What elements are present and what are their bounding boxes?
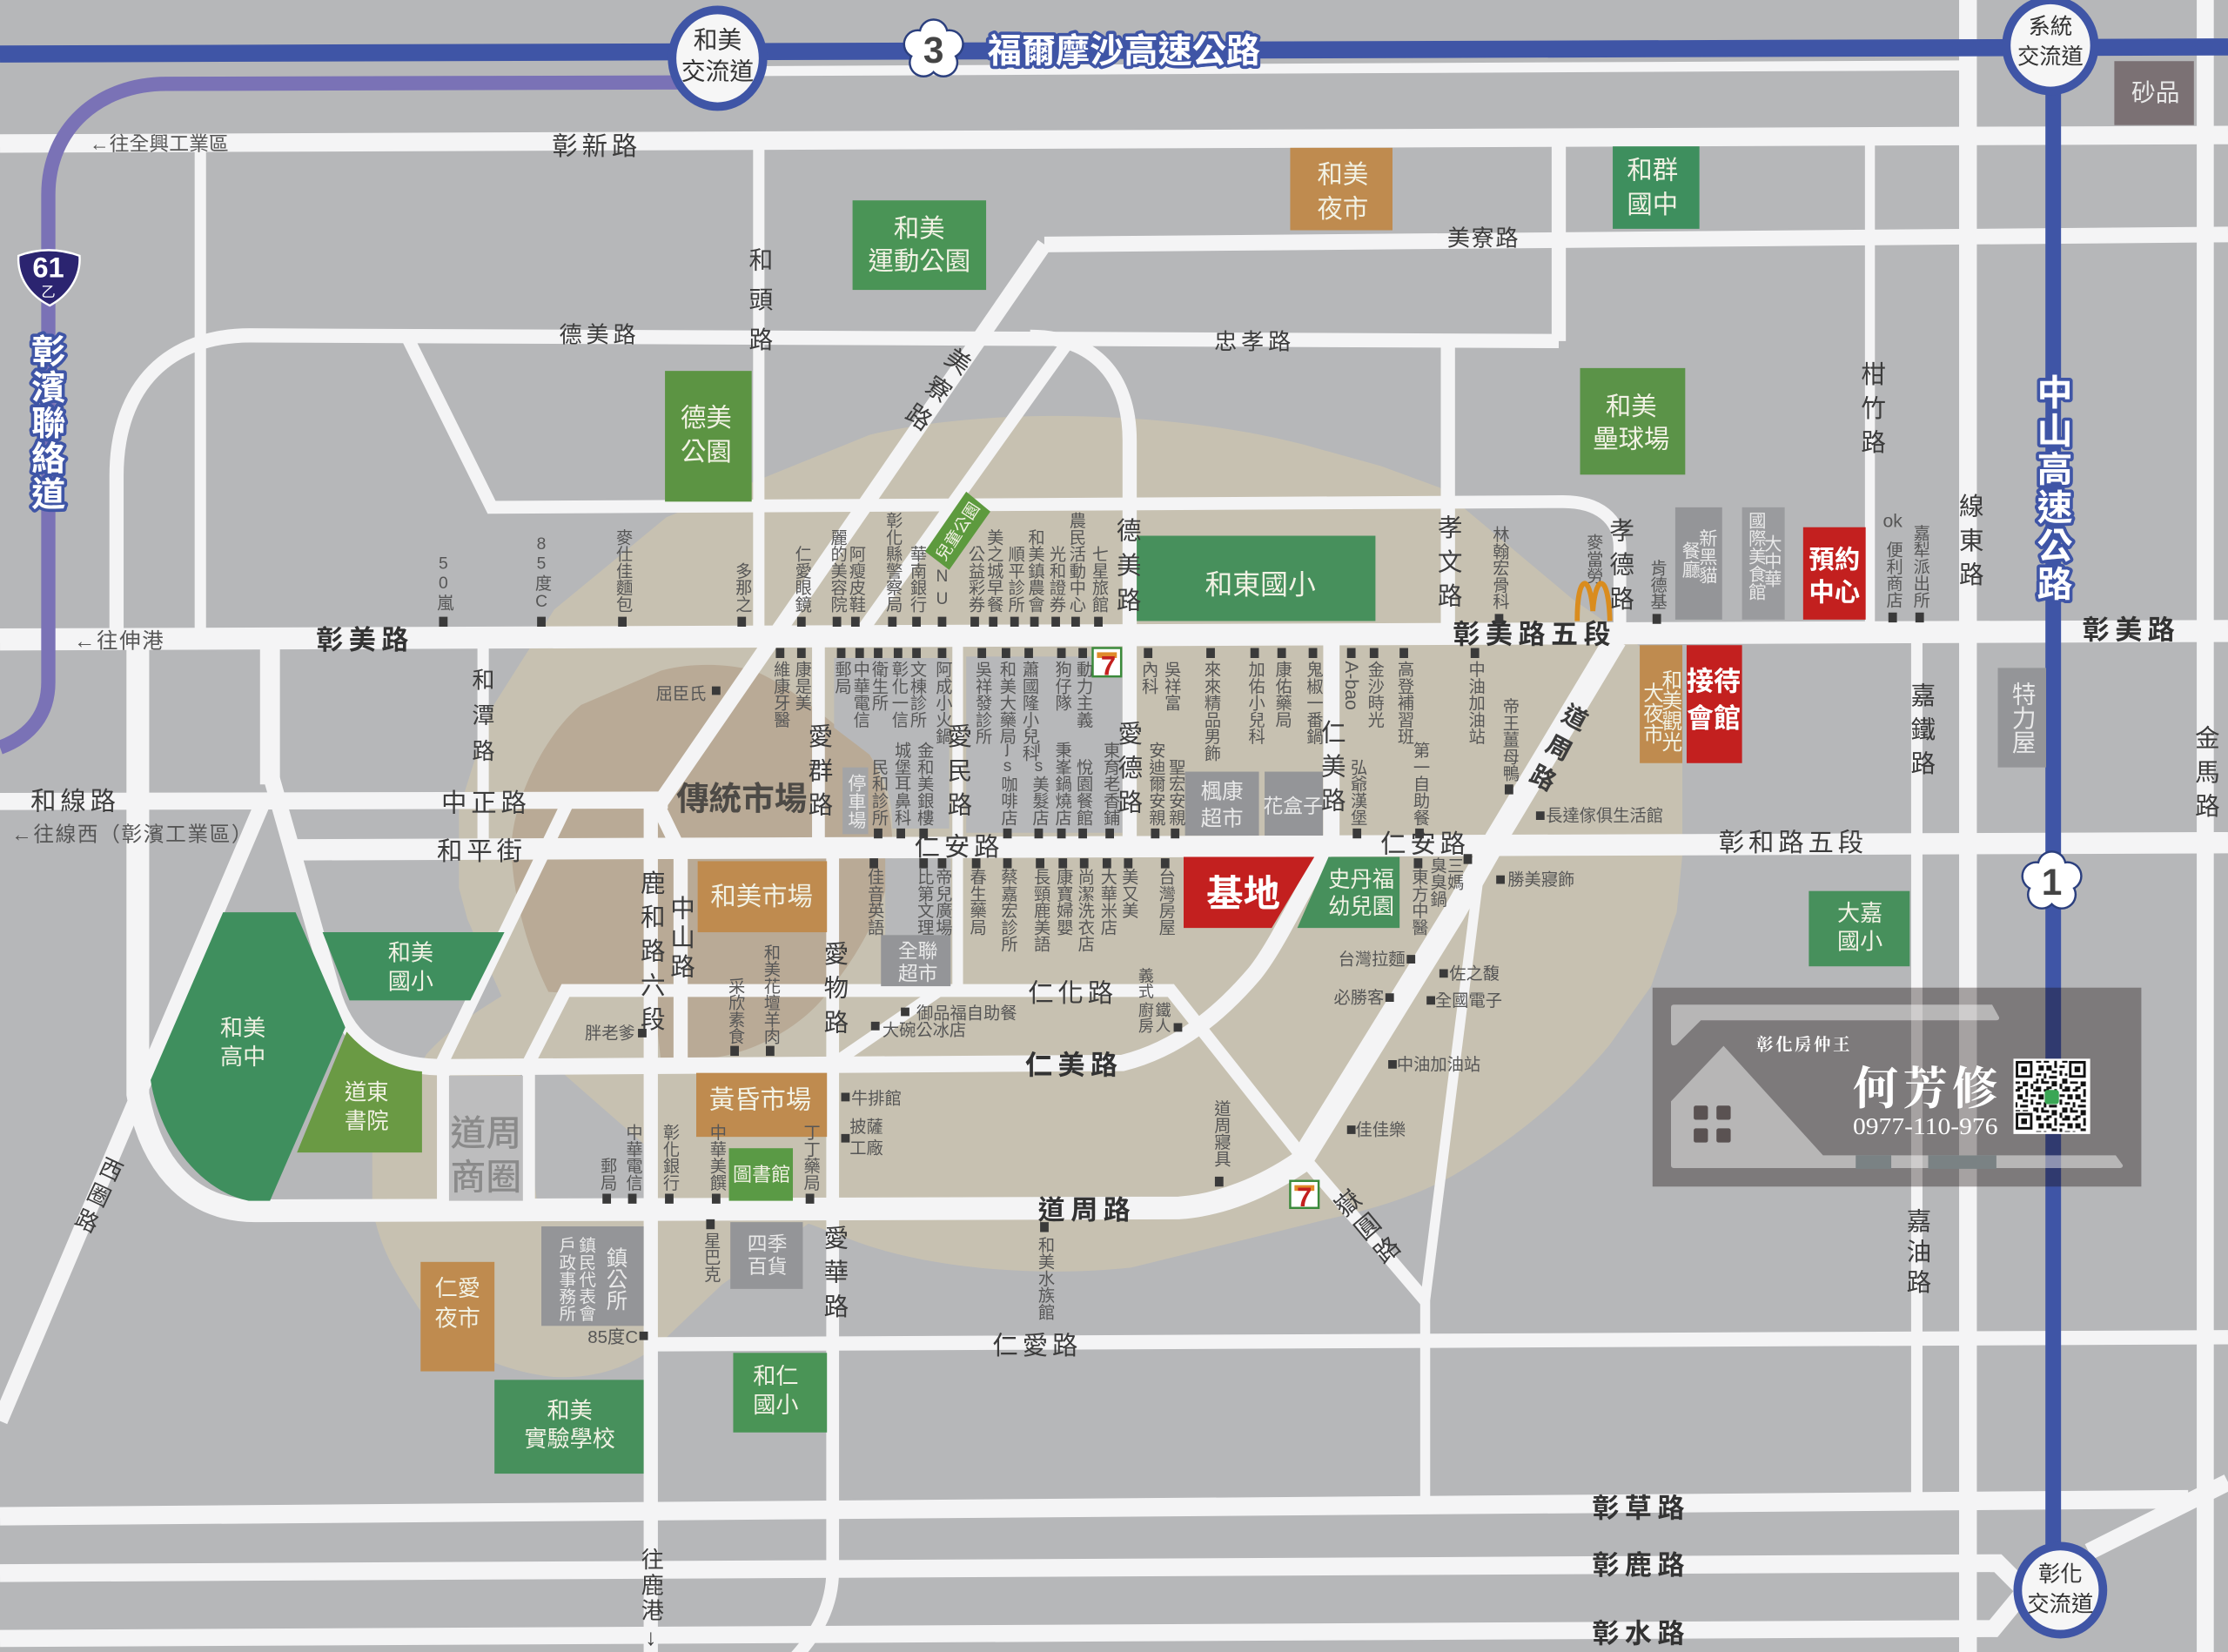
map blocks: 和美運動公園: 運動公園 — [869, 247, 970, 276]
map blocks: 圖書館 — [729, 1148, 793, 1201]
block: 鎮公所: 戶政事務所 — [556, 1236, 576, 1321]
icon: house — [1671, 1046, 2123, 1169]
store labels north of 彰美路: 便利商店 — [1883, 541, 1903, 608]
zone: beige commercial area — [372, 416, 1682, 1377]
map blocks: 和美夜市 — [1290, 148, 1392, 231]
road names: vertical: 線東路 — [1956, 494, 1983, 595]
store labels central south area: 和美水族館 — [1035, 1236, 1055, 1320]
map blocks: 德美公園: 公園 — [681, 438, 732, 467]
highlight: 基地: 基地 — [1206, 874, 1280, 915]
road names: vertical: 仁美路 — [1318, 719, 1346, 822]
road names: vertical: 愛群路 — [804, 723, 833, 826]
store labels north of 仁安路: 金和美銀樓 — [915, 742, 934, 826]
map blocks: 和美觀光大夜市: 和美觀光 — [1658, 669, 1682, 752]
shield: route 61: 乙 — [41, 285, 56, 300]
store labels south of 彰美路: 郵局 — [832, 661, 852, 695]
road names: vertical: 孝文路 — [1434, 514, 1462, 617]
map blocks: 德美公園 — [665, 371, 752, 501]
store labels south of 彰美路: 吳祥富 — [1162, 661, 1181, 711]
store labels north of 彰美路: 阿瘦皮鞋 — [846, 546, 866, 613]
store labels north of 彰美路: 農民活動中心 — [1066, 512, 1086, 613]
map blocks: school 和美國小: 和美 — [388, 940, 433, 966]
store labels central south area: 郵局 — [598, 1158, 617, 1191]
road names: diagonal — [67, 341, 1592, 1273]
store labels central south area — [585, 944, 1055, 1347]
map blocks: 和美壘球場: 和美 — [1606, 393, 1657, 421]
interchange: 和美交流道: 和美 — [694, 27, 742, 54]
store labels south of 仁安路: 佳音英語 — [865, 869, 884, 936]
store labels south of 仁安路: 春生藥局 — [967, 869, 987, 936]
icon: 7-ELEVEN south — [1290, 1181, 1319, 1212]
interchange: 和美交流道 — [672, 10, 763, 106]
store labels north of 彰美路: 麥仕佳麵包 — [614, 528, 633, 613]
road names: vertical: 愛德路 — [1114, 721, 1143, 823]
store labels north of 彰美路: 和美鎮農會 — [1025, 528, 1045, 613]
store labels south of 彰美路: 康是美 — [792, 661, 812, 711]
road names: horizontal: 仁美路 — [1025, 1050, 1124, 1080]
road names: vertical: 中山路 — [667, 896, 695, 983]
store labels south of 彰美路: A-bao — [1341, 661, 1361, 710]
zone: gray blocks — [520, 656, 1123, 1202]
interchange: 系統交流道 — [2006, 0, 2095, 91]
interchange: 彰化交流道: 交流道 — [2027, 1592, 2093, 1616]
block: 特力屋 — [1998, 668, 2046, 768]
store labels north of 仁安路: 秉峯鍋燒店 — [1052, 742, 1072, 826]
store labels north of 彰美路: 50嵐 — [434, 555, 454, 613]
highlight: 接待會館: 會館 — [1687, 703, 1741, 734]
map blocks: 和美實驗學校: 實驗學校 — [524, 1426, 615, 1452]
store labels north of 仁安路: 安迪爾安親 — [1146, 742, 1165, 826]
store labels south of 彰美路: 文棟診所 — [908, 661, 927, 728]
store labels south of 彰美路: 金沙時光 — [1365, 661, 1385, 728]
store labels south of 彰美路: 吳祥發診所 — [973, 661, 992, 745]
store labels central south area: 中華電信 — [623, 1124, 643, 1191]
block: 四季百貨: 百貨 — [748, 1255, 787, 1278]
store labels north of 彰美路: 仁愛眼鏡 — [792, 546, 812, 613]
store labels east area: 全國電子 — [1435, 992, 1502, 1011]
store labels north of 仁安路: 第一自助餐 — [1411, 742, 1430, 826]
map blocks: 大嘉國小: 國小 — [1837, 929, 1882, 955]
block: 楓康超市: 楓康 — [1201, 780, 1244, 804]
highway: 福爾摩沙高速公路 — [0, 47, 2228, 54]
map blocks: 仁愛夜市 — [420, 1262, 494, 1372]
map blocks: 大嘉國小: 大嘉 — [1837, 900, 1882, 926]
store labels north of 彰美路: 肯德基 — [1648, 560, 1668, 609]
highlight: 基地 — [1184, 857, 1314, 928]
map blocks: 史丹福幼兒園: 史丹福 — [1328, 868, 1394, 892]
block: 全聯超市: 超市 — [898, 963, 938, 985]
road names: vertical — [468, 247, 2219, 1652]
road names: horizontal: 道周路 — [1038, 1195, 1136, 1226]
store labels south of 仁安路: 康寶婦嬰 — [1054, 869, 1073, 936]
road names: horizontal: 彰新路 — [552, 132, 641, 161]
road names: horizontal: 彰草路 — [1592, 1494, 1690, 1524]
store labels south of 彰美路: 高登補習班 — [1395, 661, 1414, 745]
map blocks: 道東書院: 道東 — [345, 1081, 389, 1105]
road names: horizontal: 彰美路 — [2083, 615, 2180, 646]
store labels south of 彰美路: 來來精品男飾 — [1202, 661, 1221, 762]
map blocks: 和美觀光大夜市 — [1640, 645, 1682, 763]
shield: national highway 3 — [903, 18, 964, 77]
highlight: 預約中心 — [1803, 527, 1866, 620]
store labels south of 彰美路: 加佑小兒科 — [1245, 661, 1265, 745]
map blocks: 黃昏市場: 黃昏市場 — [709, 1085, 811, 1114]
store labels north of 彰美路: 多那之 — [733, 562, 752, 613]
store labels south of 仁安路: 帝兒廣場 — [933, 869, 953, 936]
road names: horizontal: ←往線西（彰濱工業區） — [11, 823, 253, 847]
store labels central south area: 工廠 — [849, 1138, 883, 1158]
store labels south of 仁安路: 美又美 — [1119, 869, 1138, 918]
store labels east area: 中油加油站 — [1397, 1055, 1480, 1074]
store labels north of 仁安路 — [869, 698, 1520, 838]
road names: horizontal: 彰鹿路 — [1592, 1550, 1690, 1581]
store labels south of 仁安路: 長頸鹿美語 — [1031, 869, 1050, 952]
store labels central south area: 中華美饌 — [707, 1124, 727, 1191]
interchange: 彰化交流道 — [2017, 1546, 2103, 1635]
road names: vertical: 孝德路 — [1606, 517, 1634, 620]
highway: 中山高速公路 — [2049, 57, 2058, 1563]
map blocks: 和美壘球場 — [1580, 368, 1685, 474]
block: 國際美食館大中華 — [1742, 507, 1785, 620]
store labels central south area: 牛排館 — [851, 1090, 902, 1109]
store labels central south area: 披薩 — [849, 1118, 883, 1137]
highlight: 預約中心: 中心 — [1809, 579, 1860, 608]
map blocks: school 和美國小: 國小 — [388, 968, 433, 994]
QR code — [2013, 1058, 2090, 1134]
road names: horizontal: ←往伸港 — [74, 629, 164, 654]
store labels south of 彰美路: 鬼椒一番鍋 — [1304, 661, 1324, 745]
road names: vertical: 德美路 — [1113, 517, 1141, 621]
block: 道周商圈: 道周 — [451, 1113, 521, 1153]
store labels north of 彰美路 — [434, 512, 1930, 627]
store labels north of 彰美路: 麗的美容院 — [828, 528, 848, 613]
store labels north of 彰美路: 林翰宏骨科 — [1490, 526, 1510, 609]
store labels north of 彰美路: 彰化縣警察局 — [883, 512, 903, 613]
road names: vertical: 金馬路 — [2191, 725, 2219, 827]
store labels east area: 勝美寢飾 — [1507, 870, 1574, 890]
title: 彰濱聯絡道: 彰濱聯絡道 — [27, 334, 65, 512]
map blocks: 和群國中 — [1613, 146, 1700, 229]
store labels north of 彰美路: 華南銀行 — [908, 546, 927, 613]
map blocks: 兒童公園 — [925, 492, 990, 570]
store labels north of 彰美路: 美之城早餐 — [984, 528, 1003, 613]
zone: brown market area — [512, 665, 893, 1058]
store labels north of 彰美路: ok — [1882, 512, 1903, 532]
store labels north of 仁安路: 民和診所 — [869, 759, 889, 826]
map blocks: 德美公園: 德美 — [681, 404, 732, 433]
store labels east area: 屈臣氏 — [656, 684, 706, 703]
road names: vertical: 愛民路 — [943, 723, 971, 826]
road names: diagonal: 西圈路 — [67, 1152, 126, 1240]
store labels east area: 鐵人 — [1154, 1002, 1171, 1033]
shield: national highway 3: 3 — [923, 30, 943, 71]
store labels north of 彰美路: 七星旅館 — [1090, 546, 1109, 613]
store labels north of 仁安路: 聖宏安親 — [1166, 759, 1185, 826]
road names: vertical: 和頭路 — [745, 247, 773, 366]
block: 國際美食館大中華: 國際美食館 — [1745, 512, 1767, 601]
road names: horizontal: 彰美路 — [316, 625, 414, 655]
store labels south of 彰美路 — [771, 648, 1486, 762]
title: 福爾摩沙高速公路: 福爾摩沙高速公路 — [988, 33, 1260, 71]
block: 砂品: 砂品 — [2131, 79, 2179, 106]
store labels south of 彰美路: 維康牙醫 — [771, 661, 790, 728]
store labels east area: 佳佳樂 — [1356, 1121, 1406, 1140]
block: 停車場 — [842, 768, 869, 834]
road names: vertical: 嘉鐵路 — [1907, 682, 1936, 784]
road names: vertical: 嘉油路 — [1903, 1208, 1930, 1299]
shield: national highway 1 — [2021, 850, 2083, 910]
block: 全聯超市: 全聯 — [898, 939, 938, 962]
agent phone: 0977-110-976 — [1853, 1113, 1998, 1139]
map blocks: 和群國中: 和群 — [1627, 157, 1678, 185]
block: 道周商圈: 商圈 — [451, 1158, 521, 1198]
interchange: 和美交流道: 交流道 — [681, 57, 754, 84]
map blocks: 和仁國小 — [733, 1353, 827, 1433]
map blocks: 兒童公園: 兒童公園 — [932, 499, 983, 564]
road names: vertical: 愛華路 — [820, 1225, 848, 1327]
map blocks: 和美夜市: 夜市 — [1317, 195, 1368, 224]
store labels south of 彰美路: 衛生所 — [869, 661, 889, 711]
store labels east area: 台灣拉麵 — [1339, 950, 1406, 970]
highway: 彰濱聯絡道 purple route — [0, 83, 682, 748]
shield: route 61 — [18, 250, 80, 306]
icon: 7-ELEVEN north: 7 — [1101, 651, 1116, 682]
road names: horizontal: 美寮路 — [1447, 225, 1520, 251]
store labels south of 仁安路: 台灣房屋 — [1156, 869, 1176, 936]
block: 鎮公所 — [541, 1226, 644, 1326]
map blocks: 和群國中: 國中 — [1627, 191, 1678, 219]
block: 新黑貓餐廳 — [1675, 507, 1722, 620]
road names: horizontal: 仁安路 — [1380, 830, 1470, 859]
map blocks: 和美夜市: 和美 — [1317, 161, 1368, 190]
map blocks: 圖書館: 圖書館 — [733, 1164, 790, 1185]
store labels north of 彰美路: 嘉犁派出所 — [1910, 524, 1930, 608]
title: 中山高速公路: 中山高速公路 — [2032, 373, 2072, 604]
road names: horizontal: ←往全興工業區 — [90, 132, 229, 155]
block: 特力屋: 特力屋 — [2009, 682, 2037, 754]
store labels north of 仁安路: is美髮店 — [1030, 739, 1050, 826]
store labels north of 彰美路: 85度C — [533, 535, 552, 613]
store labels north of 彰美路: NU — [933, 567, 951, 613]
map blocks: 和美觀光大夜市: 大夜市 — [1640, 682, 1664, 744]
map blocks: 和美壘球場: 壘球場 — [1593, 425, 1669, 453]
interchange: 彰化交流道: 彰化 — [2038, 1562, 2083, 1587]
store labels south of 仁安路: 東方中醫 — [1409, 869, 1429, 936]
map blocks: 和仁國小: 和仁 — [753, 1363, 799, 1389]
road names: horizontal: 忠孝路 — [1214, 329, 1295, 355]
icon: McDonald's — [1577, 583, 1610, 621]
store labels south of 彰美路: 蕭國隆小兒科 — [1020, 661, 1039, 762]
store labels north of 仁安路: 弘爺漢堡 — [1348, 759, 1367, 826]
block: 四季百貨: 四季 — [748, 1232, 787, 1255]
map blocks: 和東國小: 和東國小 — [1205, 568, 1316, 600]
map blocks: 和美運動公園 — [853, 200, 986, 290]
road names: diagonal: 嶽圓路 — [1327, 1185, 1407, 1273]
road names: horizontal: 和線路 — [30, 788, 120, 816]
store labels central south area: 85度C — [587, 1327, 638, 1347]
store labels south of 仁安路: 臭臭鍋 — [1427, 856, 1447, 907]
block: 鎮公所: 鎮民代表會 — [576, 1236, 595, 1321]
road names: vertical: 柑竹路 — [1857, 361, 1885, 463]
store labels north of 仁安路: 東育老香鋪 — [1101, 742, 1120, 826]
map blocks: school 和美高中: 高中 — [220, 1044, 265, 1070]
road names: horizontal: 仁愛路 — [992, 1332, 1082, 1360]
map blocks: 和東國小 — [1137, 536, 1375, 621]
block: 全聯超市 — [881, 935, 950, 986]
store labels south of 彰美路: 康佑藥局 — [1272, 661, 1292, 728]
road names: diagonal: 美寮路 — [894, 341, 976, 441]
road names: horizontal: 彰水路 — [1592, 1618, 1690, 1649]
store labels central south area: 彰化銀行 — [660, 1124, 680, 1191]
map blocks: 和仁國小: 國小 — [753, 1392, 799, 1418]
block: 楓康超市 — [1185, 772, 1259, 836]
map blocks: 和美實驗學校: 和美 — [547, 1397, 593, 1423]
block: 花盒子 — [1263, 772, 1323, 836]
road names: horizontal: 德美路 — [559, 321, 640, 347]
block: 新黑貓餐廳: 新黑貓 — [1696, 528, 1717, 584]
store labels south of 彰美路: 中油加油站 — [1466, 661, 1486, 745]
store labels north of 彰美路: 順平診所 — [1005, 546, 1025, 613]
store labels east area: 道周寢具 — [1211, 1100, 1231, 1167]
icon: 7-ELEVEN south: 7 — [1297, 1182, 1312, 1212]
map blocks: school 和美國小 — [323, 932, 505, 1000]
block: 鎮公所: 鎮公所 — [603, 1246, 627, 1311]
highlight: 預約中心: 預約 — [1809, 546, 1860, 574]
store labels south of 仁安路: 大華米店 — [1097, 869, 1117, 936]
store labels north of 仁安路: js咖啡店 — [998, 739, 1018, 826]
store labels east area: 廚房 — [1137, 1001, 1154, 1034]
block: 新黑貓餐廳: 餐廳 — [1680, 541, 1700, 579]
interchange: 系統交流道: 系統 — [2029, 15, 2072, 39]
road names: vertical: 愛物路 — [820, 941, 849, 1043]
map blocks: 道東書院 — [297, 1031, 422, 1152]
store labels east area: 必勝客 — [1333, 989, 1384, 1008]
road names: horizontal: 彰和路五段 — [1719, 829, 1868, 857]
road names: horizontal: 彰美路五段 — [1453, 620, 1616, 650]
block: 道周商圈 — [449, 1076, 523, 1201]
store labels south of 彰美路: 內科 — [1139, 661, 1158, 695]
store labels south of 彰美路: 中華電信 — [850, 661, 870, 728]
road names: horizontal: 和平街 — [437, 837, 527, 866]
road names: diagonal: 道周路 — [1519, 698, 1592, 802]
store labels south of 彰美路: 彰化一信 — [889, 661, 909, 728]
block: 砂品 — [2114, 61, 2194, 125]
store labels east area: 義式 — [1137, 968, 1154, 999]
map blocks: 黃昏市場 — [696, 1073, 827, 1137]
store labels south of 彰美路: 阿成小火鍋 — [933, 661, 953, 745]
store labels south of 彰美路: 和美大藥局 — [997, 661, 1017, 745]
store labels south of 仁安路 — [865, 854, 1472, 952]
road names: horizontal: 仁安路 — [915, 833, 1003, 862]
label: 傳統市場: 傳統市場 — [676, 781, 807, 817]
highlight: 接待會館 — [1687, 645, 1742, 763]
store labels north of 彰美路: 公益彩券 — [965, 546, 985, 613]
road names: horizontal: 中正路 — [441, 789, 531, 817]
store labels central south area: 御品福自助餐 — [916, 1004, 1017, 1024]
map blocks: 仁愛夜市: 仁愛 — [435, 1275, 480, 1301]
interchange: 系統交流道: 交流道 — [2017, 44, 2084, 69]
shield: route 61: 61 — [32, 251, 64, 283]
block: 楓康超市: 超市 — [1201, 807, 1244, 831]
store labels north of 仁安路: 悅園餐館 — [1074, 758, 1093, 826]
block: 國際美食館大中華: 大中華 — [1761, 534, 1782, 588]
map blocks: 史丹福幼兒園 — [1298, 857, 1399, 928]
road names: vertical: 和潭路 — [468, 668, 495, 775]
store labels north of 彰美路: 麥當勞 — [1584, 534, 1603, 584]
store labels east area: 長達傢俱生活館 — [1546, 807, 1663, 826]
store labels south of 仁安路: 比第文理 — [915, 869, 934, 936]
map blocks: 道東書院: 書院 — [345, 1109, 389, 1133]
store labels central south area: 采欣素食 — [726, 977, 745, 1044]
agent slogan: 彰化房仲王 — [1756, 1035, 1852, 1055]
map blocks: 史丹福幼兒園: 幼兒園 — [1328, 895, 1394, 919]
icon: 7-ELEVEN north — [1093, 648, 1121, 682]
store labels south of 仁安路: 尚潔洗衣店 — [1075, 869, 1095, 952]
store labels central south area: 丁丁藥局 — [801, 1124, 821, 1191]
block: 停車場: 停車場 — [845, 774, 866, 829]
map blocks: school 和美高中: 和美 — [220, 1015, 265, 1041]
store labels south of 彰美路: 動力主義 — [1074, 661, 1093, 728]
agent name: 何芳修 — [1853, 1064, 2002, 1115]
map blocks: 和美運動公園: 和美 — [894, 215, 945, 244]
map blocks: 和美市場 — [698, 861, 827, 932]
map blocks: school 和美高中 — [151, 912, 346, 1201]
store labels central south area: 大碗公冰店 — [882, 1021, 966, 1040]
store labels north of 彰美路: 光和證券 — [1047, 546, 1066, 613]
road names: horizontal: 仁化路 — [1028, 979, 1117, 1008]
store labels north of 仁安路: 城堡耳鼻科 — [892, 742, 911, 826]
road names: vertical: 往鹿港↓ — [638, 1548, 664, 1652]
store labels east area — [656, 684, 1663, 1186]
block: 花盒子: 花盒子 — [1263, 795, 1323, 817]
store labels south of 仁安路: 三媽 — [1445, 857, 1464, 891]
store labels central south area: 胖老爹 — [585, 1024, 635, 1043]
map blocks: 和美市場: 和美市場 — [710, 883, 813, 911]
store labels central south area: 星巴克 — [701, 1232, 721, 1282]
map blocks: 仁愛夜市: 夜市 — [435, 1305, 480, 1331]
shield: national highway 1: 1 — [2042, 862, 2062, 903]
block: 四季百貨 — [730, 1222, 802, 1289]
store labels south of 彰美路: 狗仔隊 — [1052, 661, 1072, 711]
highlight: 接待會館: 接待 — [1687, 666, 1741, 696]
store labels north of 仁安路: 帝王薑母鴨 — [1500, 698, 1520, 782]
agent card watermark — [1653, 988, 2141, 1186]
store labels central south area: 和美花壇羊肉 — [761, 944, 781, 1044]
map blocks: 和美實驗學校 — [494, 1380, 644, 1474]
store labels south of 仁安路: 蔡嘉宏診所 — [998, 869, 1018, 952]
road names: vertical: 鹿和路六段 — [637, 870, 665, 1040]
map blocks: 大嘉國小 — [1809, 891, 1909, 966]
store labels east area: 佐之馥 — [1449, 964, 1500, 984]
